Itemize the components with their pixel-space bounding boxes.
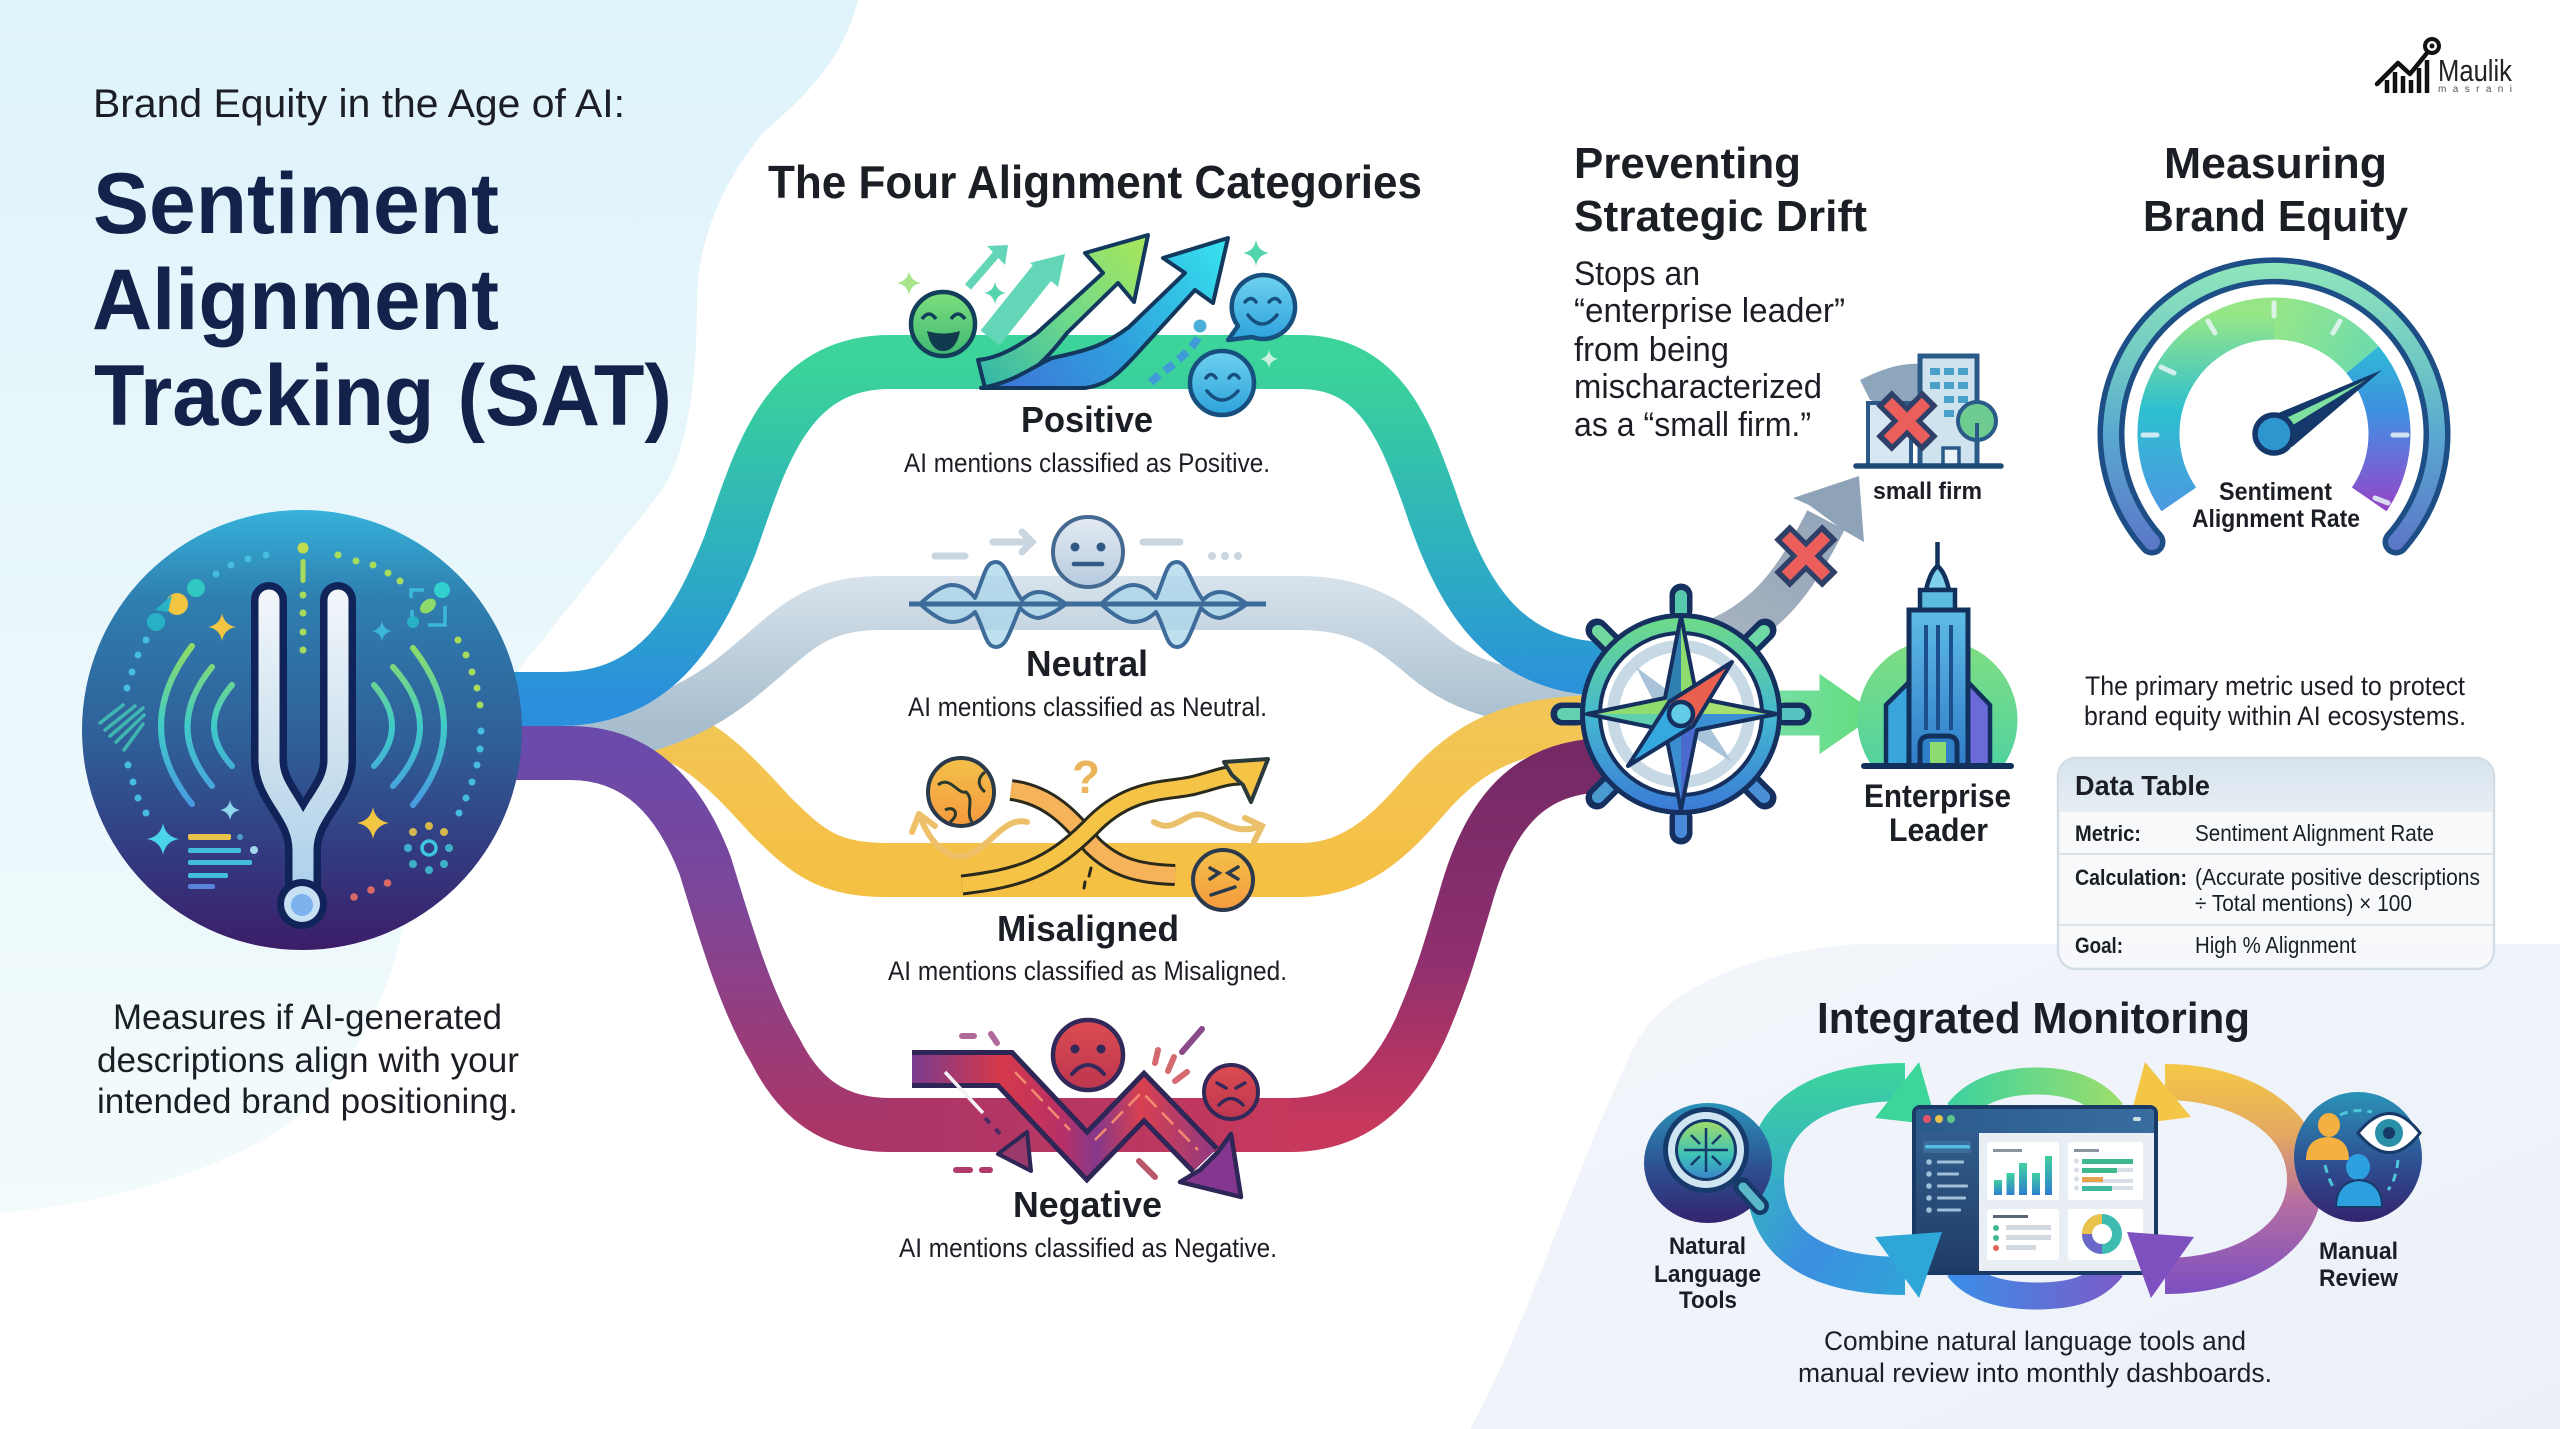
- dashboard monitor: [1914, 1107, 2156, 1273]
- icon: ship wheel compass: [1562, 595, 1800, 833]
- decorative icons in circle: [100, 579, 453, 889]
- gauge label: Sentiment: [2219, 478, 2333, 506]
- intro description: descriptions align with your: [97, 1041, 519, 1080]
- icon: small firm building: [1856, 356, 2001, 466]
- heading: measuring brand equity: Brand Equity: [2143, 192, 2409, 241]
- label: natural language tools: Natural: [1669, 1233, 1746, 1260]
- icon: enterprise leader tower: [1857, 542, 2018, 766]
- description: AI mentions classified as Positive.: [904, 448, 1270, 478]
- gauge ticks: [2143, 303, 2407, 503]
- row: metric: Sentiment Alignment Rate: [2195, 820, 2434, 846]
- strategic drift description: from being: [1574, 331, 1729, 369]
- compass star: [1587, 616, 1777, 810]
- category: misaligned: [888, 751, 1287, 986]
- label: manual review: Review: [2319, 1265, 2398, 1292]
- gauge outer band: [2111, 271, 2437, 542]
- icon: rising arrows and smiles: [897, 235, 1295, 415]
- arrow: drift to small firm: [1715, 476, 1864, 640]
- label: Misaligned: [997, 908, 1179, 949]
- icon: neutral face and waveform: [909, 517, 1266, 647]
- stream: positive: [510, 362, 1610, 699]
- description: AI mentions classified as Neutral.: [908, 692, 1267, 722]
- category: neutral: [908, 517, 1267, 722]
- label: enterprise leader: Leader: [1889, 812, 1988, 848]
- label: manual review: Manual: [2319, 1238, 2398, 1265]
- gauge label: Alignment Rate: [2192, 505, 2360, 533]
- description: AI mentions classified as Negative.: [899, 1233, 1277, 1263]
- gauge needle: [2255, 370, 2382, 453]
- stream: negative: [510, 753, 1610, 1125]
- fork body: [269, 600, 338, 929]
- integrated monitoring description: manual review into monthly dashboards.: [1798, 1358, 2272, 1388]
- icon: red x on arrow: [1782, 532, 1830, 580]
- main title: [92, 156, 672, 444]
- background blob: top left: [0, 0, 858, 1213]
- dotted arc: [124, 542, 484, 901]
- main title: Alignment: [92, 252, 499, 348]
- intro description: [97, 998, 519, 1121]
- intro description: intended brand positioning.: [97, 1082, 518, 1121]
- label: natural language tools: Language: [1654, 1261, 1761, 1288]
- heading: preventing strategic drift: Strategic Drift: [1574, 192, 1867, 241]
- gauge colored arc: [2159, 318, 2389, 499]
- flow streams: [510, 362, 1610, 1125]
- icon: crossing paths: ?: [1072, 751, 1100, 803]
- main title: Tracking (SAT): [94, 348, 672, 444]
- category: positive: [897, 235, 1295, 478]
- heading: measuring brand equity: Measuring: [2164, 139, 2387, 188]
- icon: natural language tools badge: [1644, 1103, 1772, 1223]
- strategic drift description: “enterprise leader”: [1574, 292, 1845, 330]
- strategic drift description: Stops an: [1574, 255, 1700, 293]
- data table: Data Table: [2075, 770, 2210, 801]
- monitor sidebar: [1923, 1141, 1971, 1213]
- tuning fork circle icon: [82, 510, 522, 950]
- stream: misaligned, right part: [1300, 722, 1610, 870]
- icon: crossing paths: [912, 751, 1268, 910]
- strategic drift description: [1574, 255, 1845, 444]
- list card: [1993, 1215, 2051, 1251]
- label: enterprise leader: Enterprise: [1864, 778, 2011, 814]
- row: goal: Goal:: [2075, 933, 2123, 958]
- background blob: bottom right: [1470, 944, 2560, 1429]
- intro description: Measures if AI-generated: [113, 998, 502, 1037]
- list bars card: [2074, 1149, 2133, 1191]
- label: enterprise leader: [1864, 778, 2011, 848]
- cycle arrows: upper: [1765, 1062, 2305, 1296]
- data table: [2058, 758, 2494, 969]
- label: manual review: [2319, 1238, 2398, 1292]
- heading: four alignment categories: The Four Alignment Categories: [768, 156, 1422, 208]
- label: Neutral: [1026, 643, 1148, 684]
- integrated monitoring description: Combine natural language tools and: [1824, 1326, 2246, 1356]
- strategic drift description: as a “small firm.”: [1574, 406, 1811, 444]
- description: AI mentions classified as Misaligned.: [888, 956, 1287, 986]
- main title: Sentiment: [93, 156, 499, 252]
- sound waves: [161, 646, 444, 805]
- logo: Maulik Masrani: [2377, 39, 2512, 95]
- gauge: sentiment alignment rate: [2111, 271, 2437, 542]
- monitor cards: [1987, 1142, 2143, 1260]
- row: calculation: ÷ Total mentions) × 100: [2195, 890, 2412, 916]
- wheel handles: [1562, 595, 1800, 833]
- label: natural language tools: Tools: [1679, 1287, 1737, 1314]
- row: metric: Metric:: [2075, 821, 2141, 846]
- integrated monitoring cycle: [1644, 1062, 2422, 1314]
- gauge label: [2192, 478, 2360, 533]
- stream: neutral: [570, 603, 1610, 735]
- stream: misaligned, left and flat part: [640, 728, 1302, 870]
- logo: Maulik Masrani: masrani: [2438, 84, 2512, 95]
- metric description: [2084, 671, 2466, 731]
- table header: [2059, 759, 2493, 812]
- strategic drift description: mischaracterized: [1574, 368, 1822, 406]
- label: natural language tools: [1654, 1233, 1761, 1314]
- logo: Maulik Masrani: Maulik: [2438, 53, 2512, 88]
- row: goal: High % Alignment: [2195, 932, 2357, 958]
- heading: preventing strategic drift: Preventing: [1574, 139, 1801, 188]
- label: Negative: [1013, 1184, 1162, 1225]
- row: metric: [2075, 820, 2434, 846]
- metric description: brand equity within AI ecosystems.: [2084, 701, 2466, 731]
- metric description: The primary metric used to protect: [2085, 671, 2465, 701]
- label: Positive: [1021, 399, 1153, 440]
- arrow: compass to enterprise leader: [1775, 671, 1880, 757]
- row: goal: [2075, 932, 2357, 958]
- compass needle: [1628, 662, 1732, 766]
- donut chart card: [2087, 1219, 2117, 1249]
- row: calculation: (Accurate positive descriptions: [2195, 864, 2480, 890]
- icon: falling arrow: [912, 1020, 1258, 1197]
- icon: manual review badge: [2294, 1092, 2422, 1222]
- bar chart card: [1993, 1149, 2052, 1195]
- row: calculation: Calculation:: [2075, 865, 2187, 890]
- label: small firm: small firm: [1873, 478, 1982, 505]
- subtitle: Brand Equity in the Age of AI:: [93, 82, 625, 126]
- category: negative: [899, 1020, 1277, 1263]
- integrated monitoring description: [1798, 1326, 2272, 1388]
- heading: measuring brand equity: [2143, 139, 2409, 241]
- heading: preventing strategic drift: [1574, 139, 1867, 241]
- heading: integrated monitoring: Integrated Monitoring: [1817, 994, 2250, 1043]
- cycle arrow heads: lower: [1875, 1232, 2194, 1298]
- row: calculation: [2075, 864, 2480, 916]
